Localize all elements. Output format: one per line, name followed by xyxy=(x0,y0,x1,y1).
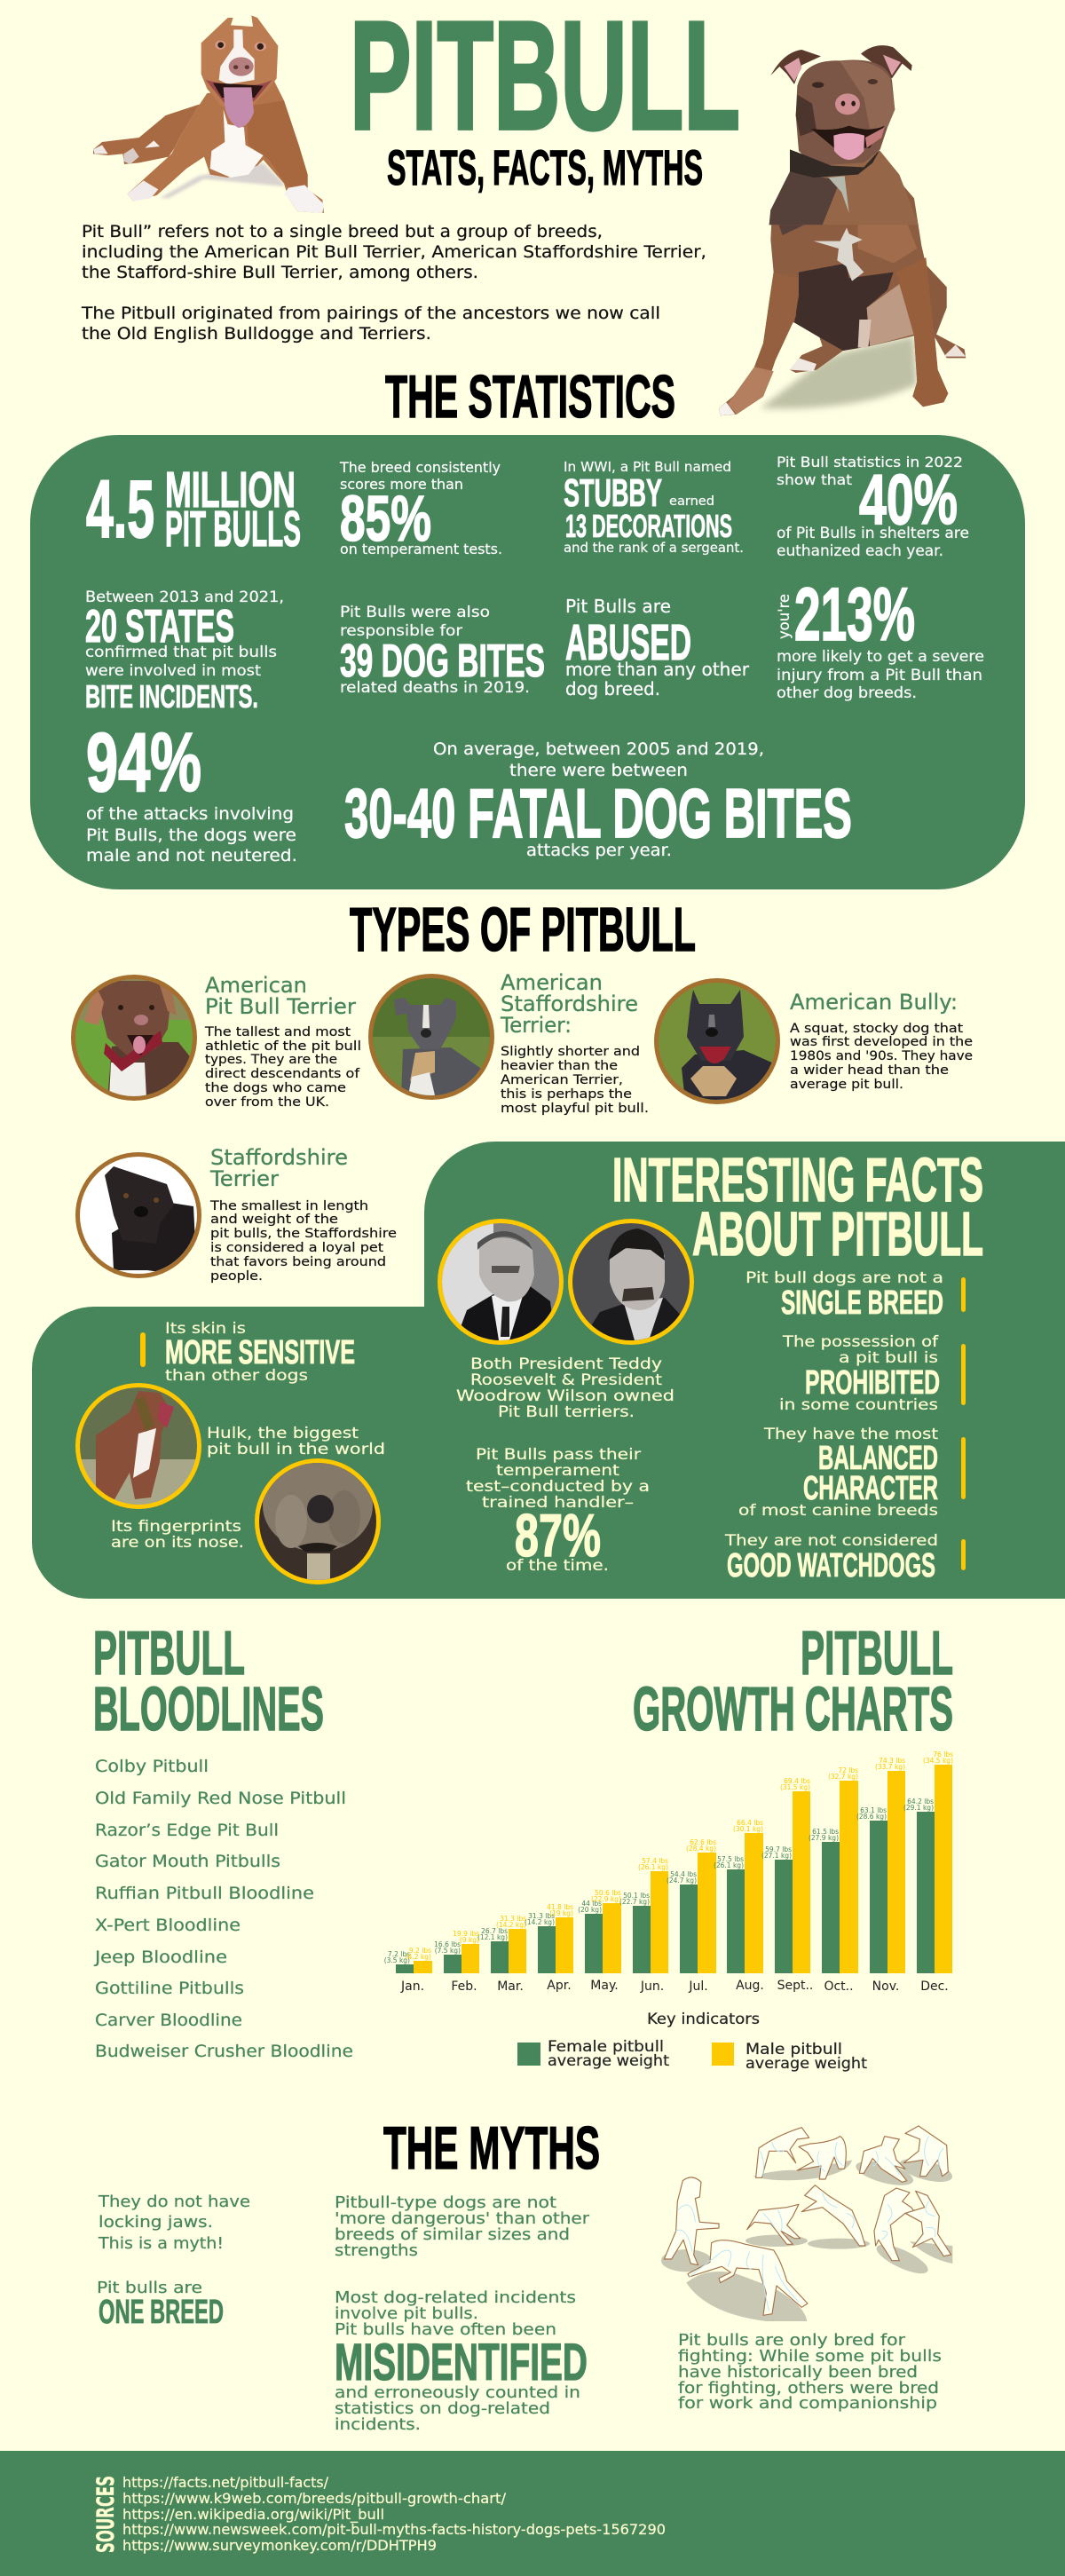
fact: more sensitive: MORE SENSITIVE xyxy=(165,1334,355,1371)
illustration: fighting dogs sketches xyxy=(661,2126,955,2321)
type: american bully xyxy=(654,978,973,1104)
heading: interesting facts xyxy=(612,1145,983,1268)
stat: 40%: euthanized each year. xyxy=(777,542,943,560)
data labels: female: (29.1 kg) xyxy=(903,1804,934,1812)
list: bloodlines: Jeep Bloodline xyxy=(94,1948,227,1967)
list: bloodlines: Ruffian Pitbull Bloodline xyxy=(95,1884,314,1903)
data labels: female: 50.1 lbs xyxy=(623,1892,650,1900)
fact: balanced character: They have the most xyxy=(763,1426,938,1443)
myth: not more dangerous: Pitbull-type dogs are not xyxy=(335,2193,556,2212)
type: staffordshire terrier xyxy=(75,1145,397,1284)
data labels: female: (20 kg) xyxy=(578,1906,602,1914)
fact: presidents: Roosevelt & President xyxy=(470,1371,662,1389)
description: this is perhaps the xyxy=(501,1087,632,1102)
stat: 85% xyxy=(339,459,502,557)
type: american pit bull terrier: Pit Bull Terrier xyxy=(205,994,356,1019)
data labels: female: 26.7 lbs xyxy=(481,1927,508,1935)
myth: misidentified: statistics on dog-related xyxy=(335,2399,550,2418)
description xyxy=(204,1025,361,1110)
month axis labels: Dec. xyxy=(920,1979,949,1994)
footer: sources xyxy=(0,2451,1065,2576)
stat: 85%: scores more than xyxy=(340,476,463,493)
photo: woodrow wilson xyxy=(438,1219,564,1345)
data labels: female: 61.5 lbs xyxy=(812,1828,839,1836)
legend: average weight xyxy=(548,2052,669,2070)
fact: temperament 87%: temperament xyxy=(496,1462,619,1480)
stat: 40%: Pit Bull statistics in 2022 xyxy=(777,454,963,470)
data labels: female: 63.1 lbs xyxy=(860,1806,887,1814)
myth: misidentified: involve pit bulls. xyxy=(335,2304,478,2323)
legend: average weight xyxy=(746,2055,867,2073)
fact: temperament 87%: test–conducted by a xyxy=(466,1478,650,1496)
myth: bred for fighting: for fighting, others were bred xyxy=(678,2379,939,2398)
panel: interesting facts background xyxy=(32,1142,1065,1599)
description: most playful pit bull. xyxy=(501,1102,649,1116)
stat: 94% xyxy=(86,715,297,865)
fact: balanced character xyxy=(738,1426,966,1520)
icon: lying pitbull photo xyxy=(93,15,324,213)
list: bloodlines: Budweiser Crusher Bloodline xyxy=(95,2042,353,2061)
label: hulk: Hulk, the biggest xyxy=(207,1425,359,1442)
data labels: female: (24.7 kg) xyxy=(667,1877,697,1885)
label: fingerprints: are on its nose. xyxy=(111,1534,244,1552)
fact: more sensitive: Its skin is xyxy=(165,1320,246,1338)
photo: staffordshire terrier xyxy=(75,1152,201,1278)
fact: more sensitive xyxy=(140,1320,355,1385)
stat: 213%: other dog breeds. xyxy=(777,684,917,702)
data labels: female: (27.9 kg) xyxy=(809,1834,839,1842)
myth: bred for fighting: Pit bulls are only bred for xyxy=(678,2331,906,2350)
data labels: male: 72 lbs xyxy=(838,1766,858,1774)
data labels: male: 31.3 lbs xyxy=(500,1915,526,1923)
month axis labels: Feb. xyxy=(451,1979,477,1994)
myth: bred for fighting: have historically been bred xyxy=(678,2363,918,2382)
stat: 30-40 fatal dog bites: On average, between 2005 and 2019, xyxy=(433,739,764,759)
stat: 39 dog bites: responsible for xyxy=(340,622,462,640)
stat: 4.5 million: PIT BULLS xyxy=(165,501,301,557)
fact: single breed: SINGLE BREED xyxy=(781,1284,943,1322)
section: interesting facts content xyxy=(75,1145,983,1584)
description: types. They are the xyxy=(205,1053,337,1067)
stat: 94%: 94% xyxy=(86,715,201,809)
data labels: female: (12.1 kg) xyxy=(477,1933,508,1941)
legend: Male pitbull xyxy=(746,2041,842,2058)
fact: temperament 87%: 87% xyxy=(515,1502,601,1569)
data labels: male: (31.5 kg) xyxy=(780,1783,810,1791)
intro text xyxy=(81,222,706,344)
stat: 85%: The breed consistently xyxy=(339,459,501,476)
data labels: male: 66.4 lbs xyxy=(737,1819,763,1827)
myth: locking jaws xyxy=(98,2193,250,2253)
data labels: female: (27.1 kg) xyxy=(761,1852,792,1860)
fact: temperament 87%: trained handler– xyxy=(482,1494,634,1512)
myth: misidentified: Most dog-related incidents xyxy=(335,2288,576,2307)
intro text: Pit Bull” refers not to a single breed but a group of breeds, xyxy=(82,222,603,241)
fact: temperament 87%: of the time. xyxy=(506,1557,609,1575)
myth: misidentified: incidents. xyxy=(335,2415,421,2434)
myth: misidentified: Pit bulls have often been xyxy=(335,2320,556,2339)
myth: one breed xyxy=(97,2279,224,2331)
data labels: male: 19.9 lbs xyxy=(453,1930,479,1938)
data labels: male: 69.4 lbs xyxy=(784,1777,810,1785)
description: direct descendants of xyxy=(205,1067,360,1081)
subtitle: STATS, FACTS, MYTHS xyxy=(387,139,703,195)
data labels: male: (22.9 kg) xyxy=(591,1895,621,1903)
fact: presidents xyxy=(456,1355,674,1421)
data labels: male: 41.8 lbs xyxy=(547,1903,573,1911)
fact: prohibited xyxy=(779,1333,966,1414)
data labels: female: 16.6 lbs xyxy=(434,1940,461,1948)
data labels: female: 44 lbs xyxy=(581,1900,602,1908)
stat: abused: dog breed. xyxy=(565,678,660,699)
fact: balanced character: BALANCED xyxy=(818,1440,938,1477)
list: bloodlines: Gator Mouth Pitbulls xyxy=(95,1852,280,1871)
stat: abused: ABUSED xyxy=(565,614,691,671)
stat: stubby: earned xyxy=(669,494,714,509)
intro text: The Pitbull originated from pairings of the ancestors we now call xyxy=(81,304,660,323)
data labels: male: 9.2 lbs xyxy=(409,1947,431,1955)
description: pit bulls, the Staffordshire xyxy=(210,1227,397,1241)
source urls xyxy=(122,2474,666,2554)
fact: prohibited: a pit bull is xyxy=(839,1349,938,1367)
description: over from the UK. xyxy=(205,1095,329,1110)
myth: bred for fighting: fighting: While some pit bulls xyxy=(678,2347,942,2366)
data labels: male: (34.5 kg) xyxy=(923,1757,953,1765)
data labels: male: (28.4 kg) xyxy=(686,1845,716,1853)
photo: american staffordshire terrier xyxy=(368,974,494,1100)
stat: stubby: STUBBY xyxy=(564,471,662,515)
fact: single breed: Pit bull dogs are not a xyxy=(746,1269,943,1287)
data labels: male: (26.1 kg) xyxy=(638,1863,668,1871)
stat: 213%: you're xyxy=(776,594,793,639)
label: hulk xyxy=(207,1425,385,1458)
list: bloodlines: Razor’s Edge Pit Bull xyxy=(95,1821,279,1840)
fact: presidents: Both President Teddy xyxy=(470,1355,662,1373)
label: fingerprints xyxy=(111,1518,244,1552)
heading: types of pitbull: TYPES OF PITBULL xyxy=(350,895,696,964)
intro text: the Old English Bulldogge and Terriers. xyxy=(82,324,431,344)
heading: pitbull bloodlines: PITBULL xyxy=(93,1618,245,1687)
fact: good watchdogs: They are not considered xyxy=(724,1532,938,1550)
data labels: female: (28.6 kg) xyxy=(856,1813,887,1821)
data labels: female: 64.2 lbs xyxy=(907,1798,934,1806)
heading: the myths: THE MYTHS xyxy=(383,2114,600,2182)
data labels: female: 59.7 lbs xyxy=(765,1845,792,1853)
data labels: female: (3.5 kg) xyxy=(384,1956,410,1964)
stat: 39 dog bites: related deaths in 2019. xyxy=(340,679,530,697)
description: the dogs who came xyxy=(205,1081,346,1095)
fact: prohibited: in some countries xyxy=(779,1396,938,1414)
fact: balanced character: of most canine breeds xyxy=(738,1502,938,1520)
bar chart: growth by month xyxy=(384,1750,953,1994)
month axis labels: Oct.. xyxy=(824,1979,854,1994)
myth: locking jaws: locking jaws. xyxy=(99,2213,213,2232)
type: american pit bull terrier xyxy=(71,973,361,1110)
description: American Terrier, xyxy=(501,1073,623,1087)
myth: not more dangerous xyxy=(335,2193,590,2260)
data labels: male: (33.7 kg) xyxy=(875,1763,905,1771)
stat: 4.5 million: MILLION xyxy=(165,462,296,518)
stat: 213%: injury from a Pit Bull than xyxy=(777,667,982,684)
description: heavier than the xyxy=(501,1059,618,1073)
data labels: male: (14.2 kg) xyxy=(496,1921,526,1929)
data labels: male xyxy=(406,1750,953,1961)
list: bloodlines: Gottiline Pitbulls xyxy=(95,1979,244,1998)
name: American xyxy=(205,973,307,998)
stat: 39 dog bites: Pit Bulls were also xyxy=(340,604,490,621)
stat: stubby: In WWI, a Pit Bull named xyxy=(564,459,731,475)
description xyxy=(501,1045,649,1116)
list: bloodlines: Carver Bloodline xyxy=(95,2011,242,2030)
data labels: male: 62.6 lbs xyxy=(690,1838,716,1846)
data labels: male: 57.4 lbs xyxy=(642,1857,668,1865)
data labels: female: (7.5 kg) xyxy=(435,1947,461,1955)
fact: single breed xyxy=(746,1269,966,1322)
stat: 94%: Pit Bulls, the dogs were xyxy=(86,826,296,845)
type: american staffordshire terrier: Terrier: xyxy=(500,1013,572,1038)
legend: Female pitbull xyxy=(548,2038,664,2056)
stat: 85%: on temperament tests. xyxy=(340,541,502,557)
stat: 213% xyxy=(776,573,984,702)
myth: misidentified xyxy=(335,2288,588,2434)
month axis labels: Mar. xyxy=(497,1979,524,1994)
heading: pitbull growth charts xyxy=(633,1618,953,1743)
description: average pit bull. xyxy=(790,1078,903,1092)
description: 1980s and '90s. They have xyxy=(790,1049,973,1063)
data labels: male: 50.6 lbs xyxy=(595,1889,621,1897)
data labels: male: (4.2 kg) xyxy=(406,1953,431,1961)
fact: good watchdogs xyxy=(724,1532,966,1584)
photo: dog nose xyxy=(255,1458,381,1584)
data labels: male: (9 kg) xyxy=(460,1936,479,1944)
source urls: https://facts.net/pitbull-facts/ xyxy=(122,2474,329,2491)
source urls: https://www.k9web.com/breeds/pitbull-growth-chart/ xyxy=(122,2490,507,2507)
stat: 20 states xyxy=(85,589,284,715)
month axis labels xyxy=(400,1979,949,1994)
description xyxy=(209,1199,397,1284)
stat: 30-40 fatal dog bites: attacks per year. xyxy=(526,841,672,860)
myth: not more dangerous: breeds of similar sizes and xyxy=(335,2225,570,2244)
description: Slightly shorter and xyxy=(501,1045,640,1059)
description: A squat, stocky dog that xyxy=(790,1022,964,1036)
description xyxy=(790,1022,973,1092)
section: pitbull bloodlines xyxy=(93,1618,353,2061)
label: hulk: pit bull in the world xyxy=(207,1441,385,1458)
section: myths text xyxy=(97,2193,942,2434)
label: sources: SOURCES xyxy=(92,2476,120,2553)
fact: prohibited: The possession of xyxy=(782,1333,939,1351)
stat: 40%: of Pit Bulls in shelters are xyxy=(777,525,969,542)
month axis labels: Aug. xyxy=(736,1979,764,1993)
source urls: https://www.newsweek.com/pit-bull-myths-facts-history-dogs-pets-1567290 xyxy=(122,2521,666,2538)
fact: more sensitive: than other dogs xyxy=(165,1367,308,1385)
panel: statistics xyxy=(30,435,1025,889)
type: american staffordshire terrier: Staffordshire xyxy=(501,992,638,1016)
stat: 39 dog bites xyxy=(340,604,545,697)
data labels: female: (14.2 kg) xyxy=(525,1918,555,1926)
stat: 213%: 213% xyxy=(794,573,915,656)
data labels: male: (19 kg) xyxy=(549,1909,573,1917)
icon: sitting pitbull photo xyxy=(719,45,966,415)
stat: 20 states: were involved in most xyxy=(85,662,261,680)
photo: american bully xyxy=(654,978,780,1104)
name: Staffordshire xyxy=(210,1145,348,1170)
stat: 85%: 85% xyxy=(340,484,431,555)
heading: the statistics: THE STATISTICS xyxy=(385,363,675,431)
myth: one breed: ONE BREED xyxy=(99,2294,224,2331)
heading: pitbull bloodlines: BLOODLINES xyxy=(93,1674,324,1743)
stat: 40%: 40% xyxy=(859,460,958,539)
source urls: https://www.surveymonkey.com/r/DDHTPH9 xyxy=(122,2537,437,2554)
myth: not more dangerous: 'more dangerous' than other xyxy=(335,2209,590,2228)
stat: 4.5 million xyxy=(86,462,301,557)
stat: stubby: 13 DECORATIONS xyxy=(565,508,732,544)
list: bloodlines: Colby Pitbull xyxy=(95,1757,209,1776)
fact: temperament 87%: Pit Bulls pass their xyxy=(476,1446,641,1464)
data labels: male: (30.1 kg) xyxy=(733,1825,763,1833)
description: was first developed in the xyxy=(790,1035,973,1049)
label: fingerprints: Its fingerprints xyxy=(111,1518,241,1536)
stat: 94%: male and not neutered. xyxy=(86,846,297,865)
fact: temperament 87% xyxy=(466,1446,650,1575)
description: The smallest in length xyxy=(209,1199,368,1213)
stat: abused: more than any other xyxy=(565,659,750,680)
intro text: including the American Pit Bull Terrier, American Staffordshire Terrier, xyxy=(82,242,706,262)
stat: stubby: and the rank of a sergeant. xyxy=(564,540,744,556)
description: and weight of the xyxy=(210,1213,338,1227)
photo: theodore roosevelt xyxy=(568,1219,694,1345)
data labels: female: 54.4 lbs xyxy=(670,1870,697,1878)
data labels: male: 74.3 lbs xyxy=(879,1757,905,1765)
month axis labels: Nov. xyxy=(872,1979,899,1994)
month axis labels: Apr. xyxy=(547,1979,572,1993)
stat: 94%: of the attacks involving xyxy=(86,804,294,824)
data labels: female: (26.1 kg) xyxy=(714,1861,744,1869)
data labels: male: (32.7 kg) xyxy=(828,1773,858,1781)
stat: 20 states: Between 2013 and 2021, xyxy=(85,589,284,606)
stat: 30-40 fatal dog bites: there were between xyxy=(509,761,688,780)
list: bloodlines: X-Pert Bloodline xyxy=(95,1916,241,1935)
stat: 20 states: BITE INCIDENTS. xyxy=(85,678,258,715)
stat: 30-40 fatal dog bites xyxy=(344,739,852,860)
data labels: male: 76 lbs xyxy=(933,1750,953,1758)
name: American Bully: xyxy=(790,990,958,1015)
myth: locking jaws: They do not have xyxy=(98,2193,250,2211)
fact: prohibited: PROHIBITED xyxy=(805,1364,940,1402)
stat: 20 states: confirmed that pit bulls xyxy=(85,644,277,661)
description: a wider head than the xyxy=(790,1063,949,1078)
data labels: female: (22.7 kg) xyxy=(619,1898,650,1906)
stat: stubby xyxy=(564,459,744,556)
intro text: the Stafford-shire Bull Terrier, among others. xyxy=(82,263,478,282)
myth: locking jaws: This is a myth! xyxy=(98,2234,224,2253)
type: american staffordshire terrier xyxy=(368,970,649,1116)
list: bloodlines xyxy=(94,1757,353,2061)
month axis labels: Jul. xyxy=(688,1979,708,1994)
description: is considered a loyal pet xyxy=(210,1241,384,1255)
fact: presidents: Woodrow Wilson owned xyxy=(456,1387,674,1405)
stat: 4.5 million: 4.5 xyxy=(86,464,154,555)
legend xyxy=(517,2011,867,2073)
myth: not more dangerous: strengths xyxy=(335,2241,418,2260)
month axis labels: Jun. xyxy=(640,1979,664,1994)
description: people. xyxy=(210,1269,263,1284)
data labels: female: 31.3 lbs xyxy=(528,1912,555,1920)
heading: pitbull bloodlines xyxy=(93,1618,324,1743)
myth: one breed: Pit bulls are xyxy=(97,2279,202,2297)
photo: hulk xyxy=(75,1383,201,1509)
stat: 213%: more likely to get a severe xyxy=(777,648,984,666)
fact: balanced character: CHARACTER xyxy=(803,1470,938,1507)
name: American xyxy=(501,970,603,995)
data labels: female: 57.5 lbs xyxy=(717,1855,744,1863)
stat: 39 dog bites: 39 DOG BITES xyxy=(340,636,545,687)
myth: bred for fighting xyxy=(678,2331,942,2413)
month axis labels: Jan. xyxy=(400,1979,424,1994)
heading: pitbull growth charts: PITBULL xyxy=(801,1618,953,1687)
myth: bred for fighting: for work and companionship xyxy=(678,2394,937,2413)
stat: 40% xyxy=(777,454,969,560)
month axis labels: May. xyxy=(590,1979,619,1993)
description: The tallest and most xyxy=(204,1025,351,1039)
description: athletic of the pit bull xyxy=(205,1039,361,1054)
month axis labels: Sept.. xyxy=(777,1979,813,1993)
list: bloodlines: Old Family Red Nose Pitbull xyxy=(95,1789,346,1808)
stat: 40%: show that xyxy=(777,471,852,488)
stat: 20 states: 20 STATES xyxy=(85,601,234,652)
data labels: female: 7.2 lbs xyxy=(388,1950,410,1958)
photo: american pit bull terrier xyxy=(71,975,197,1101)
source urls: https://en.wikipedia.org/wiki/Pit_bull xyxy=(122,2506,384,2524)
stat: abused: Pit Bulls are xyxy=(565,596,671,617)
data labels: female xyxy=(384,1798,934,1964)
stat: abused xyxy=(565,596,750,699)
description: that favors being around xyxy=(210,1255,386,1269)
legend: Key indicators xyxy=(647,2011,760,2028)
myth: misidentified: and erroneously counted in xyxy=(335,2383,580,2402)
fact: good watchdogs: GOOD WATCHDOGS xyxy=(727,1547,935,1584)
fact: presidents: Pit Bull terriers. xyxy=(498,1403,635,1421)
type: staffordshire terrier: Terrier xyxy=(209,1166,279,1191)
myth: misidentified: MISIDENTIFIED xyxy=(335,2334,588,2391)
